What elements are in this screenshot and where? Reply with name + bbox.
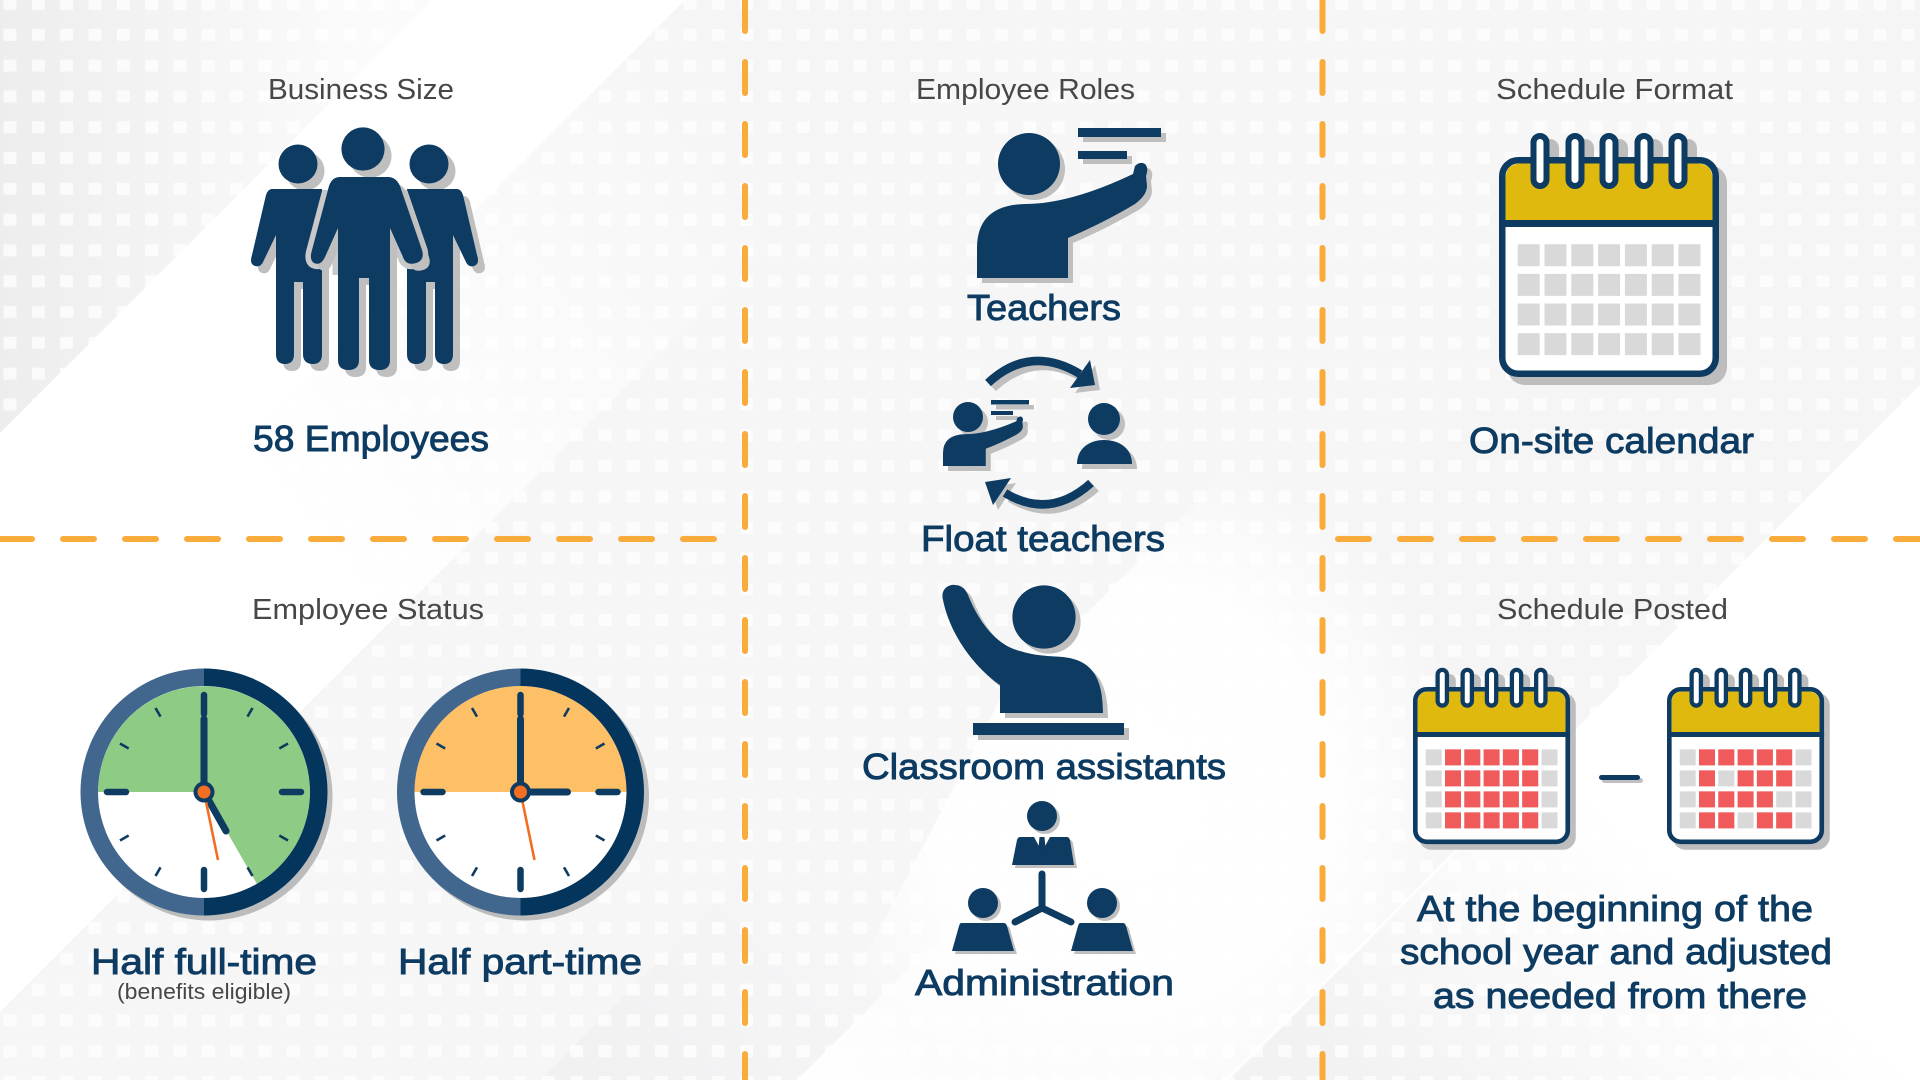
icon: three people (251, 127, 485, 377)
heading: schedule format: Schedule Format (1496, 74, 1733, 106)
panel: schedule posted (1400, 594, 1832, 1016)
icon: classroom assistant (942, 585, 1129, 740)
panel: employee roles (862, 74, 1226, 1003)
icon: dash between calendars (1599, 775, 1643, 783)
text: schedule timing: school year and adjusted (1400, 931, 1832, 972)
panel: schedule format (1469, 74, 1754, 461)
label: float teachers: Float teachers (921, 518, 1165, 559)
panel: employee status (80, 594, 649, 1004)
icon: on-site calendar (1499, 136, 1727, 385)
panel: business size (251, 74, 489, 459)
label: classroom assistants: Classroom assistants (862, 746, 1226, 787)
text: schedule timing: as needed from there (1433, 975, 1807, 1016)
label: 58 employees: 58 Employees (253, 418, 489, 459)
heading: schedule posted: Schedule Posted (1497, 594, 1728, 626)
icon: clock full-time (80, 668, 332, 920)
icon: float teachers (943, 360, 1137, 510)
label: half full-time: Half full-time (91, 941, 317, 982)
text: schedule timing: At the beginning of the (1417, 888, 1813, 929)
label: administration: Administration (915, 962, 1174, 1003)
icon: teacher (977, 128, 1166, 283)
icon: clock part-time (397, 668, 649, 920)
icon: calendar adjusted (1667, 670, 1830, 850)
icon: calendar full (1413, 670, 1576, 850)
label: on-site calendar: On-site calendar (1469, 420, 1754, 461)
heading: business size: Business Size (268, 74, 454, 106)
label: half part-time: Half part-time (398, 941, 642, 982)
text: schedule timing (1400, 888, 1832, 1016)
note: benefits eligible: (benefits eligible) (117, 979, 291, 1004)
label: teachers: Teachers (967, 287, 1121, 328)
heading: employee status: Employee Status (252, 594, 484, 626)
heading: employee roles: Employee Roles (916, 74, 1135, 106)
icon: administration (952, 801, 1136, 954)
